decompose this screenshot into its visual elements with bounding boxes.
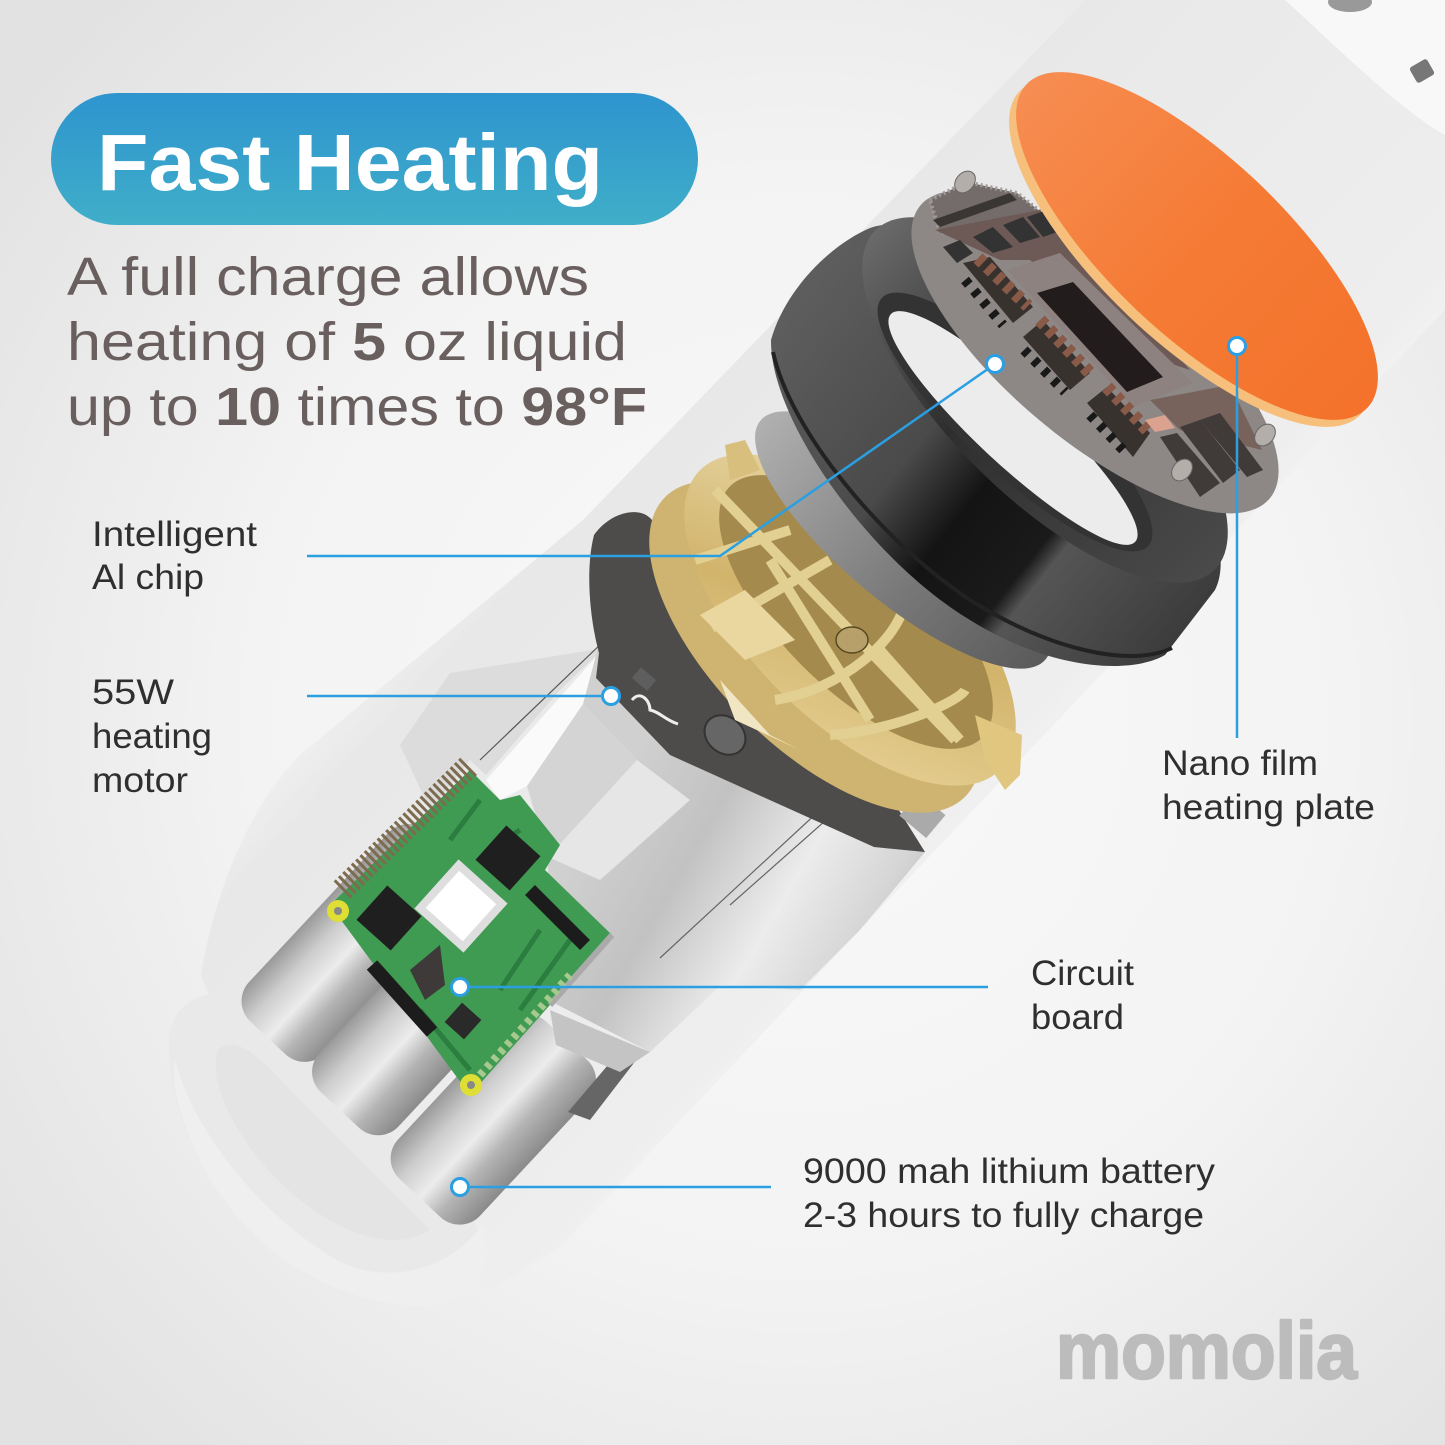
description text: A full charge allows bbox=[67, 247, 589, 307]
circuit board bbox=[327, 765, 612, 1096]
leader: Nano film heating plate bbox=[1228, 338, 1246, 738]
label: Intelligent AI chip: Intelligent bbox=[92, 515, 257, 554]
yellow mounting holes bbox=[327, 900, 349, 922]
pink pad bbox=[1145, 415, 1175, 432]
illustration: exploded bottle warmer bbox=[169, 0, 1445, 1306]
solder pad row bbox=[480, 975, 570, 1075]
top cap of bottle bbox=[1285, 0, 1445, 135]
description text: up to 10 times to 98°F bbox=[67, 377, 647, 437]
label: 55W heating motor bbox=[92, 673, 212, 800]
black chips bbox=[357, 886, 421, 950]
label: battery: 9000 mah lithium battery bbox=[803, 1152, 1216, 1191]
label: Circuit board: Circuit bbox=[1031, 954, 1134, 993]
metal edge bbox=[550, 935, 612, 1005]
title pill bbox=[51, 93, 698, 225]
label: battery: 2-3 hours to fully charge bbox=[803, 1196, 1204, 1235]
leader: Circuit board bbox=[452, 978, 988, 996]
brown contact strips bbox=[978, 258, 1028, 306]
black ring bbox=[771, 162, 1283, 666]
label: Intelligent AI chip: Al chip bbox=[92, 558, 204, 597]
control circuit disc bbox=[864, 138, 1326, 566]
description text: heating of 5 oz liquid bbox=[67, 312, 627, 372]
dark gray disc bbox=[721, 373, 1085, 707]
label: Nano film heating plate bbox=[1162, 744, 1375, 827]
green PCB bbox=[330, 770, 612, 1095]
top header bbox=[933, 193, 1017, 227]
leader: Intelligent AI chip bbox=[307, 356, 1004, 556]
leader: 55W heating motor bbox=[307, 688, 620, 704]
label: Intelligent AI chip bbox=[92, 515, 257, 597]
main black chip bbox=[1037, 282, 1163, 392]
silver sleeve strip bbox=[400, 648, 604, 810]
lower right bars bbox=[1160, 433, 1220, 497]
label: 55W heating motor: heating bbox=[92, 717, 212, 756]
orange heating plate bbox=[959, 20, 1428, 479]
screw posts bbox=[950, 167, 1280, 485]
gold heat sink bbox=[594, 399, 1071, 868]
base cap inner ring bbox=[216, 1045, 430, 1240]
leader: battery bbox=[452, 1178, 771, 1196]
description text bbox=[67, 247, 647, 437]
small components bbox=[965, 280, 1003, 325]
title pill: Fast Heating bbox=[97, 118, 603, 207]
connectors bbox=[372, 965, 432, 1032]
mesh area bbox=[930, 182, 1047, 233]
translucent bottle shell bbox=[201, 0, 1445, 1290]
label: 55W heating motor: 55W bbox=[92, 673, 174, 712]
label: battery bbox=[803, 1152, 1216, 1235]
motor inner gap bbox=[527, 704, 637, 857]
label: Nano film heating plate: heating plate bbox=[1162, 788, 1375, 827]
label: Nano film heating plate: Nano film bbox=[1162, 744, 1318, 783]
white processor bbox=[414, 859, 508, 953]
battery cells bbox=[230, 812, 608, 1236]
label: Circuit board: board bbox=[1031, 998, 1124, 1037]
logo: momolia: momolia bbox=[1056, 1306, 1357, 1395]
trace area bbox=[935, 210, 1190, 370]
pin header bbox=[342, 765, 470, 890]
gray tile bbox=[1007, 253, 1193, 407]
chip bars bbox=[963, 257, 1033, 323]
traces bbox=[420, 800, 570, 1070]
top SMD rows bbox=[943, 240, 973, 263]
white sleeve band bbox=[486, 648, 604, 800]
dark motor mount bbox=[589, 512, 925, 852]
lower bracket bbox=[568, 1045, 640, 1120]
base cap translucent overlay bbox=[174, 1060, 487, 1306]
label: 55W heating motor: motor bbox=[92, 761, 188, 800]
base cap bbox=[169, 993, 483, 1306]
label: Circuit board bbox=[1031, 954, 1134, 1037]
motor cylinder bbox=[548, 648, 925, 1052]
